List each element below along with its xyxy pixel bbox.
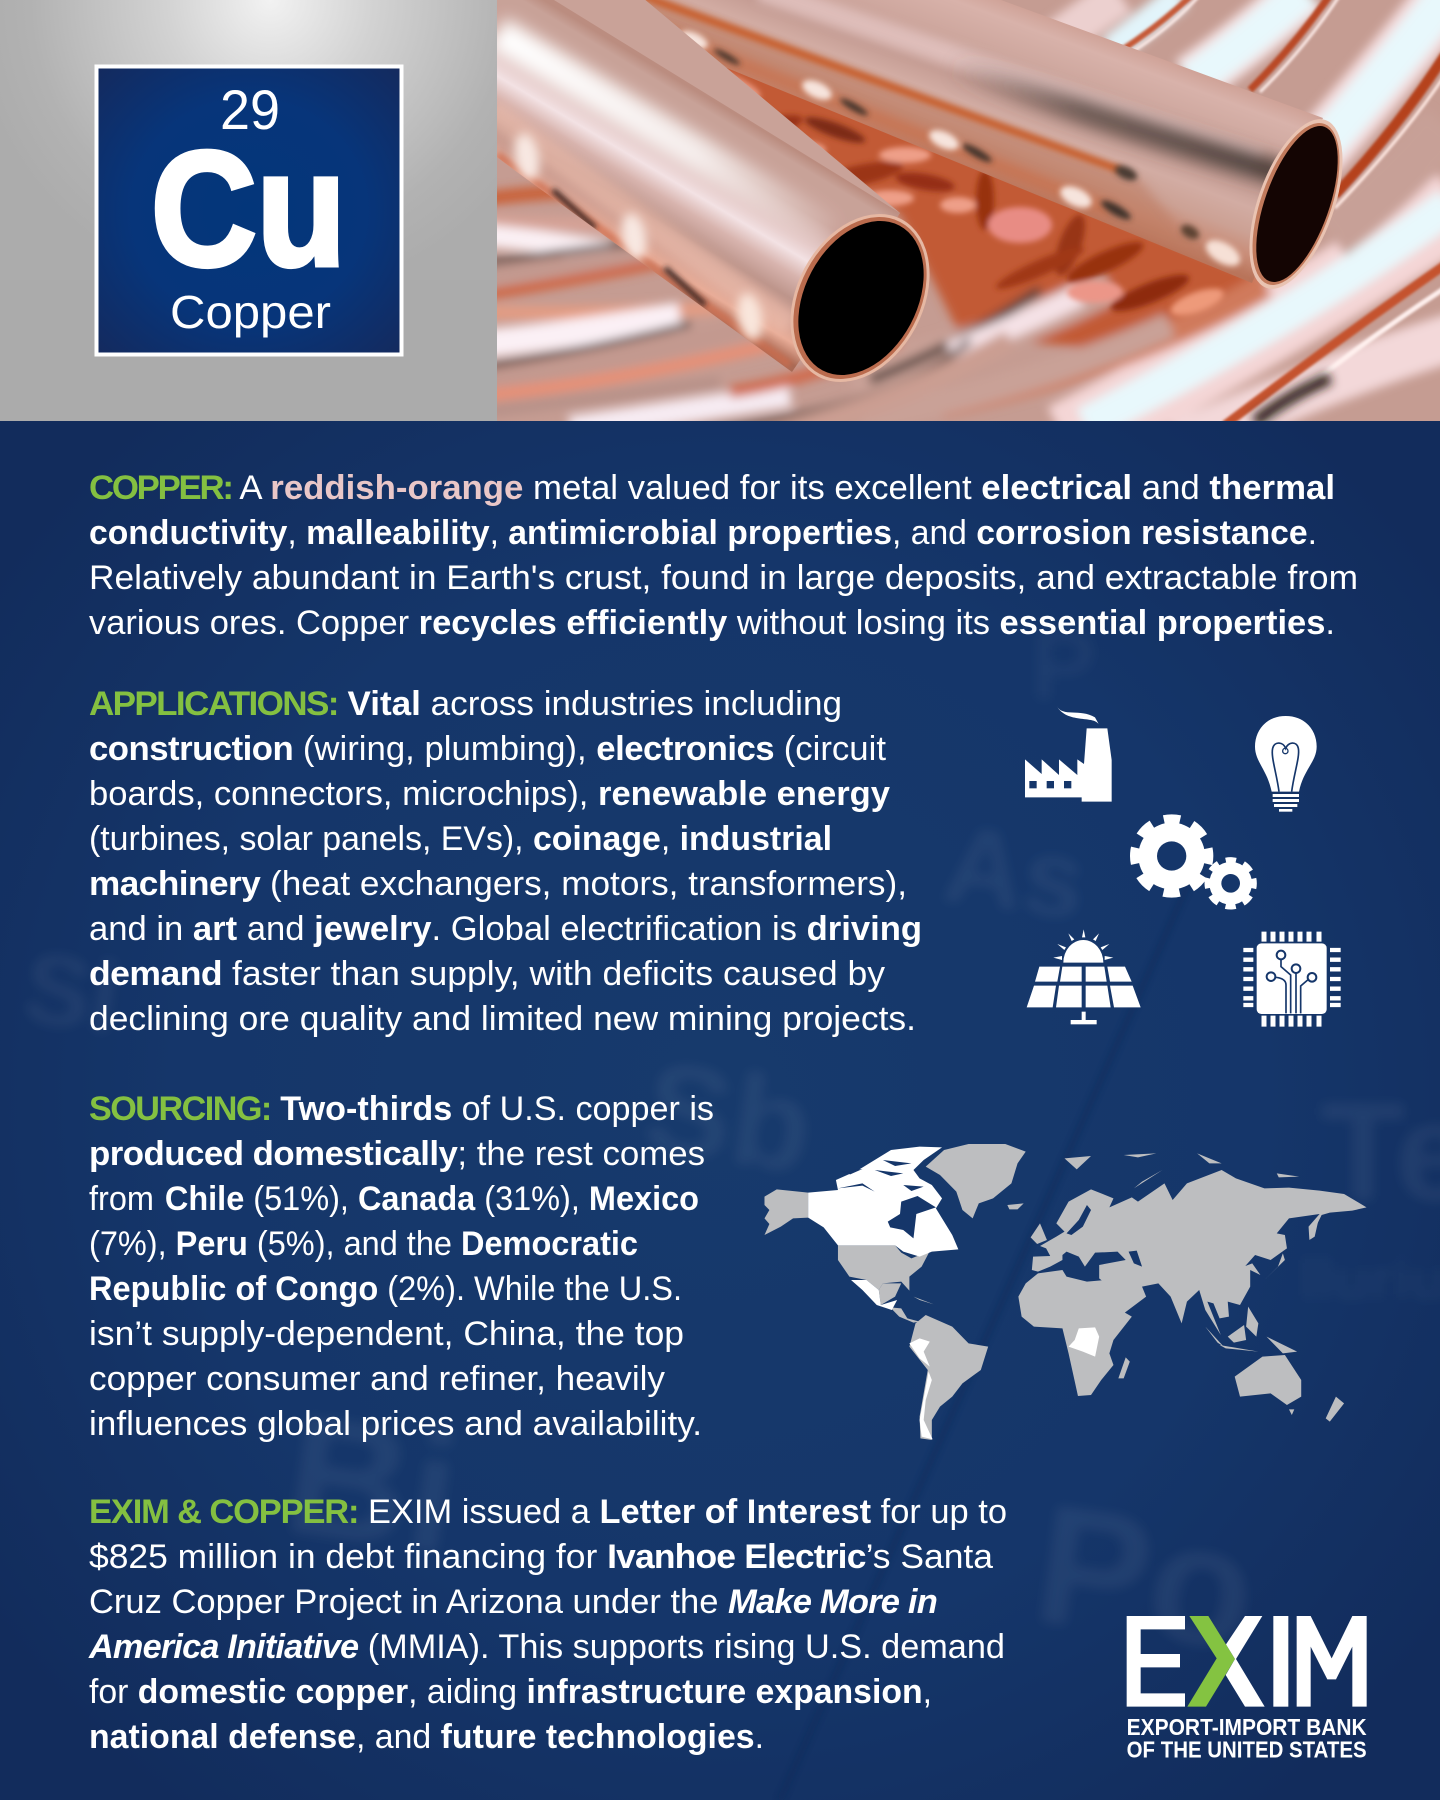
text: EXIM and copper paragraph: $825 million in debt financing for Ivanhoe Electric ’s Santa — [89, 1538, 993, 1576]
text: sourcing paragraph: (7%), Peru (5%), and the Democratic — [89, 1225, 638, 1263]
text: sourcing paragraph: copper consumer and refiner, heavily — [89, 1360, 665, 1398]
text: EXIM and copper paragraph: Cruz Copper Project in Arizona under the Make More in — [89, 1583, 937, 1621]
icon: circuit chip — [1243, 932, 1341, 1027]
logo wordmark — [1127, 1714, 1367, 1763]
text: copper paragraph — [89, 469, 1358, 642]
world map — [764, 1144, 1367, 1440]
text: sourcing paragraph: produced domestically ; the rest comes — [89, 1135, 705, 1173]
text: copper paragraph: various ores. Copper recycles efficiently without losing its essential properties. — [89, 604, 1335, 642]
icon: factory — [1025, 706, 1112, 802]
Hudson Bay and Arctic channels — [838, 1160, 936, 1238]
text: sourcing paragraph: SOURCING: Two-thirds of U.S. copper is — [89, 1090, 714, 1128]
tube: front — [497, 0, 930, 382]
text: copper paragraph: COPPER: A reddish-orange metal valued for its excellent electrical and thermal — [89, 469, 1335, 507]
text: EXIM and copper paragraph: for domestic copper, aiding infrastructure expansion, — [89, 1673, 932, 1711]
text: EXIM and copper paragraph: America Initiative (MMIA). This supports rising U.S. demand — [88, 1628, 1005, 1666]
icons: applications — [1025, 706, 1341, 1027]
text: sourcing paragraph: Republic of Congo (2%). While the U.S. — [89, 1270, 682, 1308]
text: applications paragraph: (turbines, solar panels, EVs), coinage, industrial — [89, 820, 832, 858]
text: applications paragraph — [89, 685, 922, 1038]
section background — [28, 485, 1440, 1716]
element symbol: Cu — [151, 117, 346, 300]
soft background coils — [480, 0, 1440, 445]
text: applications paragraph: boards, connectors, microchips), renewable energy — [89, 775, 890, 813]
text: EXIM and copper paragraph: EXIM & COPPER: EXIM issued a Letter of Interest for up to — [89, 1493, 1007, 1531]
element name: Copper — [170, 286, 331, 338]
text: applications paragraph: machinery (heat exchangers, motors, transformers), — [89, 865, 907, 903]
section background: P — [1030, 610, 1097, 722]
text: sourcing paragraph: from Chile (51%), Canada (31%), Mexico — [89, 1180, 699, 1218]
land: grey countries — [764, 1144, 1367, 1440]
text: sourcing paragraph: isn’t supply-dependent, China, the top — [89, 1315, 684, 1353]
atomic number: 29 — [220, 78, 280, 141]
section background: Si — [17, 931, 126, 1055]
photo: copper tubes — [480, 0, 1440, 445]
highlighted countries — [808, 1147, 1099, 1439]
text: applications paragraph: demand faster than supply, with deficits caused by — [89, 955, 885, 993]
copper streaks — [1122, 0, 1440, 425]
text: copper paragraph: conductivity, malleability, antimicrobial properties, and corrosion resistance. — [89, 514, 1317, 552]
header left panel — [0, 0, 497, 421]
logo chevron — [1187, 1616, 1235, 1707]
mottled reflections between tubes — [731, 71, 1226, 318]
section background: As — [937, 802, 1093, 943]
seas — [1067, 1205, 1142, 1267]
text: applications paragraph: declining ore quality and limited new mining projects. — [89, 1000, 916, 1038]
section background: Bi — [275, 1378, 470, 1590]
text: EXIM and copper paragraph: national defense, and future technologies. — [89, 1718, 764, 1756]
element tile: Cu — [96, 66, 402, 354]
section background: Sb — [636, 1033, 821, 1201]
icon: gears — [1135, 819, 1254, 907]
icon: solar panel — [1027, 929, 1141, 1024]
section background: Po — [1025, 1468, 1266, 1687]
text: sourcing paragraph: influences global prices and availability. — [89, 1405, 702, 1443]
text: EXIM and copper paragraph — [88, 1493, 1007, 1756]
text: applications paragraph: construction (wiring, plumbing), electronics (circuit — [89, 730, 887, 768]
logo wordmark: OF THE UNITED STATES — [1127, 1737, 1367, 1763]
logo wordmark: EXPORT-IMPORT BANK — [1127, 1714, 1367, 1740]
logo: EXIM — [1127, 1616, 1367, 1763]
icon: light bulb — [1255, 716, 1317, 812]
text: copper paragraph: Relatively abundant in Earth's crust, found in large deposits, and extractable from — [89, 559, 1358, 597]
text: applications paragraph: APPLICATIONS: Vital across industries including — [89, 685, 842, 723]
text: applications paragraph: and in art and jewelry. Global electrification is driving — [89, 910, 922, 948]
text: sourcing paragraph — [89, 1090, 714, 1443]
tube: rear — [646, 0, 1342, 289]
